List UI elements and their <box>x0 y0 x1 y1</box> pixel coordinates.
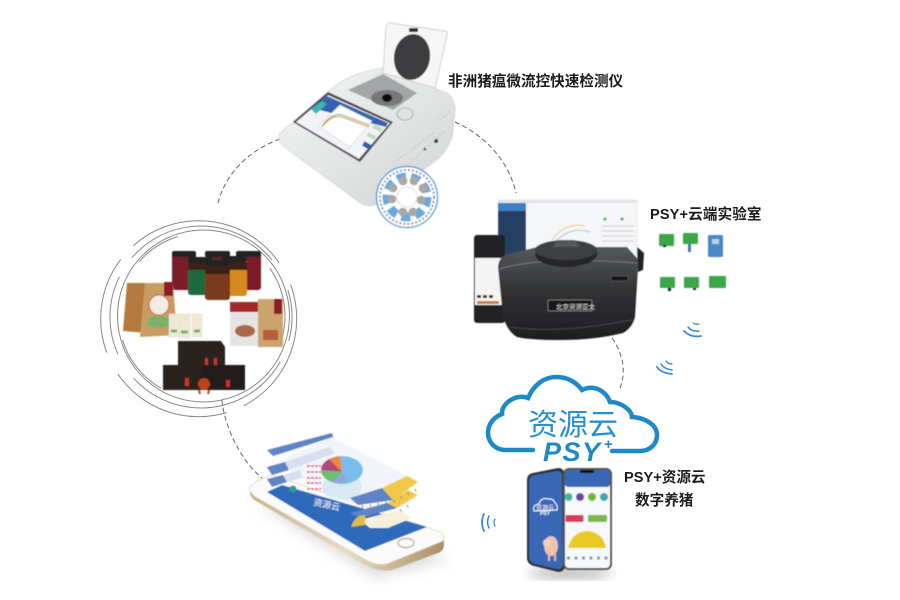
left phone: 资源云 <box>536 504 554 512</box>
pie chart lower <box>322 474 362 500</box>
app buttons <box>566 515 607 522</box>
phone shadow <box>528 568 612 578</box>
cloud logo text: 资源云 <box>528 409 618 442</box>
home button <box>398 538 414 548</box>
black gateway device: 北京资源亚太 <box>556 302 596 311</box>
instrument knob <box>397 108 413 120</box>
app phones <box>527 468 612 578</box>
wifi icon near phones <box>482 514 495 531</box>
yellow headers <box>382 476 418 508</box>
kraft bags left <box>123 282 177 337</box>
wifi icon lower <box>657 361 672 374</box>
gold smartphone with data layers <box>250 433 450 578</box>
phone shadow <box>258 505 450 578</box>
instrument vent dots <box>398 110 452 168</box>
dark gift boxes <box>163 341 245 394</box>
left phone: PSY <box>540 511 551 517</box>
sauce jars <box>172 251 261 300</box>
label: cloud lab: PSY+云端实验室 <box>650 205 762 223</box>
microfluidic disc <box>376 166 438 228</box>
small sachets <box>169 314 202 338</box>
cloud outline <box>488 377 657 451</box>
sensor cylinder <box>474 235 505 323</box>
ring frame around products <box>73 193 325 444</box>
blue headers <box>350 488 397 518</box>
mini teal icon <box>290 486 296 492</box>
white logo on screen: 资源云 <box>313 497 341 513</box>
app icons <box>564 493 608 501</box>
instrument sample well <box>348 74 417 110</box>
layer headers <box>267 433 333 487</box>
data layer translucent panel <box>280 437 417 500</box>
app tab bar <box>567 556 608 560</box>
pig illustration <box>543 536 558 561</box>
phone body <box>250 475 444 570</box>
PSY wordmark: PSY <box>543 437 603 467</box>
pie chart top <box>319 456 363 486</box>
resource cloud logo <box>488 377 657 467</box>
label: PSY resource cloud: PSY+资源云 <box>624 469 706 486</box>
label: digital pig farming: 数字养猪 <box>635 491 694 509</box>
instrument body <box>279 68 455 206</box>
product display <box>123 251 283 394</box>
cloud lab device group <box>474 200 644 340</box>
packaged pork right <box>230 299 283 347</box>
instrument touch screen <box>293 92 393 162</box>
pale header strips <box>283 447 335 482</box>
data table rows <box>362 490 416 522</box>
instrument side ports <box>424 139 438 150</box>
instrument: microfluidic detector <box>279 23 455 206</box>
black gateway device <box>498 240 644 340</box>
instrument lid <box>383 23 447 88</box>
left phone <box>527 468 565 572</box>
yellow dial <box>568 531 606 548</box>
yellow semicircle <box>351 515 365 527</box>
dashed connection circle <box>218 122 623 478</box>
cream data panel <box>360 510 412 528</box>
wifi icon upper <box>684 323 701 336</box>
chart legends <box>307 466 321 489</box>
sensor modules <box>659 233 726 291</box>
phone screen <box>267 485 427 551</box>
dashboard screen <box>498 200 637 260</box>
right phone <box>563 468 612 570</box>
plus sign: + <box>604 436 613 453</box>
label: detector: 非洲猪瘟微流控快速检测仪 <box>448 72 624 90</box>
